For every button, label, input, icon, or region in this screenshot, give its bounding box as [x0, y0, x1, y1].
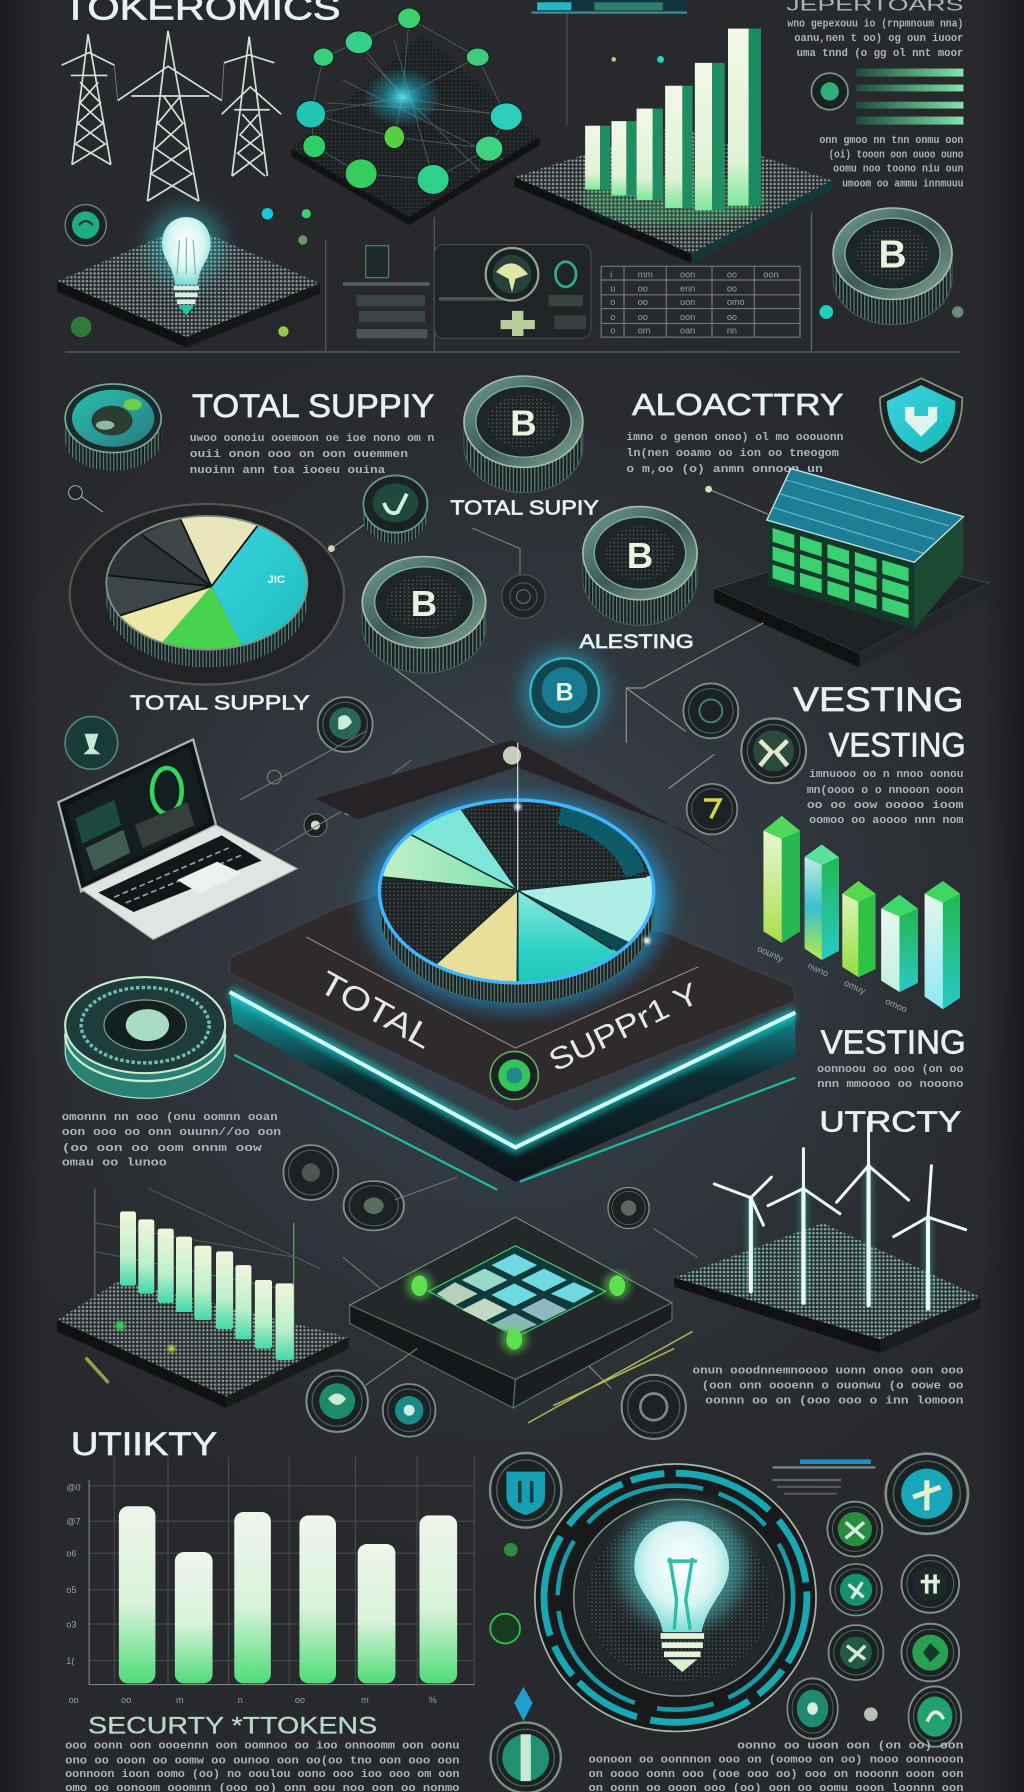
table: enn: [680, 283, 695, 293]
text block: lower left: omau oo lunoo: [62, 1157, 167, 1170]
heading: vesting three: VESTING: [821, 1025, 966, 1062]
text block: top right: wno gepexouu io (rnpmnoum nna): [787, 17, 963, 30]
platform badge: [490, 1051, 538, 1099]
table: oo: [727, 283, 737, 293]
coin: center upper: B: [510, 402, 537, 443]
rising bar chart on plate: [514, 29, 832, 263]
text block: lower right: (oon onn oooenn o ouonwu (o oowe oo: [702, 1380, 964, 1393]
text block: allocation: ln(nen ooamo oo ion oo tneogom: [626, 447, 839, 460]
text block: total supply: [190, 432, 434, 477]
axis labels: %: [429, 1695, 437, 1705]
table: oon: [680, 270, 695, 280]
small label: vesting: ALESTING: [579, 631, 694, 653]
bars: [119, 1506, 457, 1683]
axis labels: o3: [66, 1619, 76, 1629]
text block: bottom right: [589, 1740, 964, 1792]
text block: lower right: [693, 1365, 964, 1407]
icon: badge with connector: [328, 475, 427, 552]
table: oon: [763, 270, 779, 280]
pie chart left: [69, 486, 344, 685]
icon: badge left: [65, 717, 118, 769]
heading: vesting two: VESTING: [829, 727, 966, 765]
small label: total supply lower: TOTAL SUPPLY: [130, 692, 310, 715]
platform label: total: TOTAL: [313, 964, 439, 1057]
connector lines: [394, 623, 763, 789]
coin: left centre: [362, 557, 486, 673]
text block: vesting three: [817, 1063, 964, 1091]
icon: glowing token: B: [555, 679, 574, 707]
axis labels: @0: [66, 1482, 81, 1492]
vesting bar chart: [756, 816, 960, 1015]
text block: right middle: onn gmoo nn tnn onmu oon: [819, 134, 964, 147]
coin: upper right of centre: [583, 507, 697, 625]
axis labels: m: [176, 1695, 184, 1705]
axis labels: [66, 1482, 437, 1705]
vesting bar chart: oounty: [756, 944, 785, 964]
text block: total supply: uwoo oonoiu ooemoon oe ioe nono om n: [190, 432, 434, 445]
lightbulb on plate: [57, 207, 320, 347]
text block: allocation: o m,oo (o) anmn onnoon un: [626, 463, 823, 476]
coin: left centre: B: [411, 583, 437, 624]
building with solar roof on plate: [705, 469, 989, 667]
upper chevron band: [314, 739, 734, 859]
text block: lower right: onun ooodnnemnoooo uonn onoo oon ooo: [693, 1365, 964, 1378]
text block: allocation: [626, 431, 844, 476]
utility bar chart: [66, 1457, 474, 1705]
declining bar chart on plate: [57, 1189, 349, 1408]
table: oo: [727, 312, 737, 322]
icon: badges under chip: [306, 1331, 693, 1439]
heading: total supply: TOTAL SUPPIY: [192, 388, 434, 424]
table: [601, 266, 800, 337]
coin: top right: [833, 208, 952, 325]
central platform: [230, 739, 795, 1190]
table: nn: [727, 326, 737, 336]
text block: security tokens: [65, 1740, 460, 1792]
top center screen fragment: [531, 0, 687, 126]
text block: allocation: imno o genon onoo) ol mo ooouonn: [626, 431, 844, 444]
text block: right middle: (oi) tooon oon ouoo ouno: [829, 149, 964, 162]
text block: bottom right: oonoon oo oonnnon ooo on (oomoo on oo) nooo oonnooon: [589, 1753, 964, 1766]
small label: total supply: TOTAL SUPIY: [450, 496, 599, 519]
coin: upper right of centre: B: [627, 535, 653, 576]
token disc lower left: [65, 977, 225, 1098]
icon: badge dark ring: [683, 683, 738, 738]
icon: small node rings: [240, 731, 411, 851]
icon: glowing token: [521, 649, 608, 736]
table: o: [610, 326, 615, 336]
text block: vesting: oo oo oow ooooo ioom: [807, 799, 964, 812]
laptop: [58, 739, 297, 939]
coin: top right: B: [879, 233, 907, 276]
table: o: [610, 312, 615, 322]
text block: vesting three: nnn mmoooo oo nooono: [817, 1078, 964, 1091]
text block: vesting: oomoo oo aoooo nnn nom: [809, 814, 964, 827]
table: o: [610, 297, 615, 307]
text block: lower left: oon ooo oo onn ouunn//oo oon: [62, 1126, 281, 1139]
small control bars: [773, 1459, 875, 1495]
network diagram on plate: [291, 8, 539, 225]
small decorative indicator dots: [71, 56, 963, 337]
text block: bottom right: oonno oo uoon oon (on oo) oon: [737, 1740, 964, 1753]
text block: security tokens: oonnoon ioon oomo (oo) no ooulou oono ooo ioo ooo om oon: [65, 1768, 460, 1781]
text block: total supply: ouii onon ooo on oon ouemmen: [190, 448, 408, 461]
axis labels: oo: [295, 1695, 305, 1705]
legend stripes with dial: [811, 69, 963, 125]
axis labels: o5: [66, 1585, 76, 1595]
bars: [120, 1211, 294, 1360]
icon: power transmission towers: [62, 31, 281, 201]
main pie chart: [354, 743, 686, 1011]
icon: small badge top left: [65, 205, 106, 246]
table: oo: [638, 297, 648, 307]
table: u: [610, 283, 615, 293]
text block: vesting: imnuooo oo n nnoo oonou: [809, 768, 964, 781]
coin: center upper: [464, 376, 583, 493]
pie chart left: JIC: [267, 574, 285, 586]
heading: security tokens: SECURTY *TTOKENS: [88, 1713, 377, 1740]
heading: allocation: ALOACTTRY: [632, 387, 843, 422]
text block: top right: uma tnnd (o gg ol nnt moor: [797, 47, 964, 60]
vesting bar chart: nwno: [806, 961, 830, 979]
coin: total supply: [65, 384, 161, 471]
text block: vesting three: oonnoou oo ooo (on oo: [817, 1063, 964, 1076]
text block: security tokens: ooo oonn oon oooennn oon oomnoo oo ioo onnoomm oon oonu: [65, 1740, 460, 1753]
table: i: [610, 270, 612, 280]
text block: bottom right: on oooo oonn ooo (ooe ooo oo) ooo on nooonn ooon oon: [589, 1768, 964, 1781]
text block: lower left: [62, 1111, 281, 1170]
axis labels: @7: [66, 1517, 81, 1527]
large lightbulb dial: [535, 1464, 816, 1731]
text block: lower left: (oo oon oo oom onnm oow: [62, 1142, 262, 1155]
axis labels: m: [361, 1695, 369, 1705]
text block: lower right: oonnn oo on (ooo ooo o inn lomoon: [705, 1394, 964, 1407]
panel: dashboard rows: [326, 217, 434, 351]
axis labels: oo: [69, 1695, 79, 1705]
network nodes: [296, 8, 522, 194]
text block: security tokens: ono oo ooon oo oomw oo ounoo oon oo(oo tno oon ooo oon: [65, 1754, 460, 1767]
icon: node rings mid: [283, 1145, 697, 1314]
vesting bar chart: omoo: [884, 996, 909, 1015]
icon: badges around dial: [490, 1453, 968, 1792]
platform label: supply: SUPPr1 Y: [543, 976, 704, 1078]
wind turbines on plate: [674, 1118, 981, 1353]
text block: total supply: nuoinn ann toa iooeu ouina: [190, 464, 385, 477]
icon: badge ring: [318, 697, 373, 752]
bars: [585, 29, 761, 210]
table: uon: [680, 297, 695, 307]
text block: top right: oanu,nen t oo) og oun iuoor: [794, 32, 964, 45]
table: om: [638, 326, 650, 336]
icon: shield: [880, 378, 962, 463]
panel: gauge card: [434, 245, 591, 338]
axis labels: o6: [66, 1549, 76, 1559]
table: oon: [680, 312, 695, 322]
axis labels: oo: [121, 1695, 131, 1705]
table: omo: [727, 297, 745, 307]
divider rule: [65, 213, 960, 352]
heading: utility: UTIIKTY: [71, 1426, 217, 1462]
table: mm: [638, 270, 653, 280]
icon: badge cream glyph: [741, 718, 806, 783]
heading: utility top: UTRCTY: [819, 1106, 961, 1138]
chip grid on plate: [350, 1217, 672, 1408]
table: oo: [638, 283, 648, 293]
text block: vesting: [807, 768, 964, 827]
icon: badge yellow glyph: [687, 784, 737, 834]
text block: lower left: omonnn nn ooo (onu oomnn ooan: [62, 1111, 278, 1124]
vesting bar chart: omuy: [843, 978, 867, 996]
connector and ring node: [472, 528, 545, 618]
axis labels: 1(: [66, 1656, 74, 1666]
text block: right middle: oomu noo toono niu oun: [833, 162, 964, 175]
text block: right middle: [819, 134, 964, 190]
text block: top right: [787, 17, 964, 60]
text block: vesting: mn(oooo o o nnooon ooon: [807, 784, 964, 797]
table: oo: [727, 270, 737, 280]
table: oan: [680, 326, 695, 336]
heading: vesting one: VESTING: [793, 681, 963, 719]
table: oo: [638, 312, 648, 322]
axis labels: n: [238, 1695, 243, 1705]
text block: right middle: umoom oo ammu innmuuu: [842, 177, 964, 190]
